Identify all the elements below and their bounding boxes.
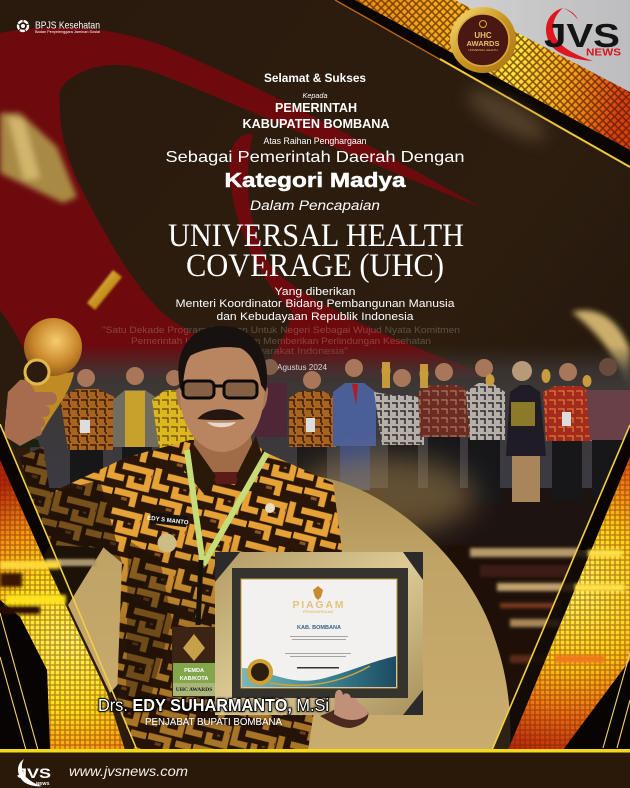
faded stage caption: Masyarakat Indonesia" bbox=[238, 346, 348, 357]
recipient 10 bbox=[506, 361, 546, 502]
giver text: Menteri Koordinator Bidang Pembangunan Manusia bbox=[176, 298, 455, 310]
stage floor bbox=[30, 488, 630, 548]
raised hand bbox=[4, 380, 57, 446]
piagam heading: PIAGAM bbox=[292, 599, 344, 611]
gold badge bbox=[158, 534, 176, 552]
id card: KAB/KOTA bbox=[180, 676, 208, 682]
recipient 5 bbox=[289, 371, 336, 485]
JVS News logo: NEWS bbox=[586, 48, 621, 58]
moustache bbox=[200, 410, 242, 419]
framed certificate bbox=[215, 552, 423, 715]
main figure: official bbox=[4, 318, 342, 750]
frame corners bbox=[215, 552, 423, 715]
JVS News logo bbox=[544, 8, 621, 61]
JVS News logo: JVS bbox=[544, 17, 620, 54]
dark fade at disc lower left bbox=[110, 680, 139, 750]
recipient 4 bbox=[253, 359, 287, 437]
right dotted gold panel bbox=[492, 425, 630, 750]
recipient name: KAB. BOMBANA bbox=[297, 625, 341, 631]
collar bbox=[184, 436, 264, 494]
heading text block: KABUPATEN BOMBANA bbox=[242, 116, 390, 131]
BPJS Kesehatan logo: Badan Penyelenggara Jaminan Sosial bbox=[35, 30, 100, 34]
footer logo: NEWS bbox=[36, 781, 50, 786]
glasses bbox=[183, 381, 257, 398]
person title: PENJABAT BUPATI BOMBANA bbox=[145, 717, 282, 728]
BPJS Kesehatan logo bbox=[18, 20, 100, 34]
blurred gold streak right bbox=[572, 310, 630, 395]
UHC title bbox=[168, 218, 464, 284]
left dotted gold panel bbox=[0, 423, 137, 750]
website: www.jvsnews.com bbox=[69, 763, 188, 779]
id card: UHC AWARDS bbox=[176, 687, 212, 693]
faded stage caption bbox=[102, 325, 460, 357]
award medal: AWARDS bbox=[467, 39, 499, 48]
trophy bbox=[8, 318, 82, 448]
footer logo: JVS bbox=[17, 765, 51, 781]
footer bar bbox=[0, 749, 630, 788]
recipient 11 bbox=[543, 363, 598, 500]
held trophies bbox=[382, 364, 592, 387]
id card: PEMDA bbox=[184, 668, 204, 674]
heading text block: Dalam Pencapaian bbox=[250, 198, 380, 213]
recipient 9 bbox=[466, 359, 505, 503]
blurred gold ribbon left bbox=[0, 113, 77, 203]
recipient 6 bbox=[333, 359, 376, 490]
heading text block bbox=[166, 71, 464, 213]
name tag: EDY S MANTO bbox=[147, 515, 189, 527]
gold confetti bbox=[87, 270, 122, 310]
UHC title: COVERAGE (UHC) bbox=[186, 248, 444, 284]
award medal: UNIVERSAL HEALTH bbox=[468, 48, 498, 52]
recipient 2 bbox=[113, 367, 160, 490]
mat bbox=[232, 568, 408, 698]
gold disc behind certificate bbox=[68, 476, 510, 750]
undershirt bbox=[212, 472, 240, 484]
smile bbox=[207, 422, 236, 427]
giver text: dan Kebudayaan Republik Indonesia bbox=[216, 311, 414, 323]
heading text block: Kepada bbox=[302, 91, 328, 100]
recipient 3 bbox=[152, 370, 195, 455]
ears bbox=[176, 385, 268, 412]
BPJS Kesehatan logo: BPJS Kesehatan bbox=[35, 20, 100, 32]
award medal bbox=[450, 7, 516, 73]
right shirt pin bbox=[265, 503, 275, 513]
UHC title: UNIVERSAL HEALTH bbox=[168, 218, 464, 254]
giver text bbox=[176, 286, 455, 323]
frame bbox=[215, 552, 423, 715]
lower stage blurred reflections bbox=[440, 545, 630, 750]
giver text: Yang diberikan bbox=[274, 286, 356, 298]
heading text block: Sebagai Pemerintah Daerah Dengan bbox=[166, 149, 464, 166]
recipient 12 bbox=[586, 358, 630, 498]
faded stage caption: Pemerintah Indonesia Dalam Memberikan Perlindungan Kesehatan bbox=[131, 336, 431, 347]
seal bbox=[247, 659, 273, 685]
lanyard bbox=[187, 450, 267, 565]
person name: Drs. EDY SUHARMANTO, M.Si bbox=[98, 695, 329, 715]
heading text block: Atas Raihan Penghargaan bbox=[264, 136, 366, 146]
neck bbox=[192, 430, 255, 482]
wave decoration bbox=[242, 656, 396, 687]
holding hand bbox=[320, 690, 368, 728]
gold glow above disc bbox=[295, 457, 475, 533]
footer logo bbox=[17, 759, 51, 786]
framed certificate: PENGHARGAAN bbox=[303, 610, 333, 614]
faded stage caption: "Satu Dekade Program Jaminan Untuk Negeri Sebagai Wujud Nyata Komitmen bbox=[102, 325, 460, 336]
stage photo backdrop bbox=[30, 345, 630, 490]
heading text block: Kategori Madya bbox=[224, 170, 407, 192]
id card bbox=[172, 627, 215, 697]
recipient 8 bbox=[418, 363, 470, 503]
top-right diagonal band bbox=[335, 0, 630, 167]
heading text block: Selamat & Sukses bbox=[264, 71, 366, 85]
award medal: UHC bbox=[474, 31, 492, 40]
gold wave bbox=[270, 666, 370, 685]
face bbox=[180, 336, 264, 452]
stage date: Agustus 2024 bbox=[277, 363, 328, 372]
emblem bbox=[313, 586, 323, 600]
lanyard strap bbox=[198, 560, 201, 625]
recipient 1 bbox=[60, 369, 117, 488]
paper bbox=[241, 579, 397, 688]
recipient 7 bbox=[374, 362, 424, 500]
red curved shapes bbox=[0, 27, 500, 378]
citation lines bbox=[285, 636, 351, 668]
heading text block: PEMERINTAH bbox=[275, 100, 357, 115]
hair bbox=[178, 326, 267, 392]
shirt bbox=[20, 440, 342, 750]
award recipients group bbox=[60, 358, 630, 503]
